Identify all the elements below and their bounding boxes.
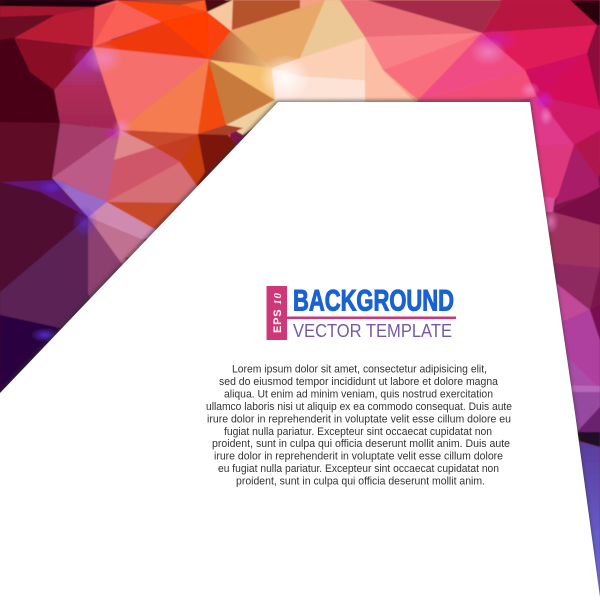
pink EPS tag: [266, 286, 287, 340]
body text: proident, sunt in culpa qui officia deserunt mollit anim.: [236, 476, 485, 488]
divider line: [287, 316, 456, 319]
body text: [206, 364, 512, 488]
body text: ullamco laboris nisi ut aliquip ex ea commodo consequat. Duis aute: [206, 401, 512, 413]
subheading: VECTOR TEMPLATE: VECTOR TEMPLATE: [293, 321, 452, 341]
body text: sed do eiusmod tempor incididunt ut labore et dolore magna: [219, 376, 499, 388]
body text: proident, sunt in culpa qui officia deserunt mollit anim. Duis aute: [212, 438, 510, 450]
body text: irure dolor in reprehenderit in voluptate velit esse cillum dolore: [214, 451, 503, 463]
body text: aliqua. Ut enim ad minim veniam, quis nostrud exercitation: [224, 388, 493, 400]
logo badge: [266, 284, 456, 341]
body text: eu fugiat nulla pariatur. Excepteur sint occaecat cupidatat non: [218, 463, 499, 475]
body text: Lorem ipsum dolor sit amet, consectetur adipisicing elit,: [232, 364, 487, 376]
body text: fugiat nulla pariatur. Excepteur sint occaecat cupidatat non: [224, 426, 492, 438]
heading: BACKGROUND: BACKGROUND: [293, 284, 454, 318]
EPS 10 label: EPS 10: [272, 292, 284, 333]
body text: irure dolor in reprehenderit in voluptate velit esse cillum dolore eu: [207, 413, 511, 425]
